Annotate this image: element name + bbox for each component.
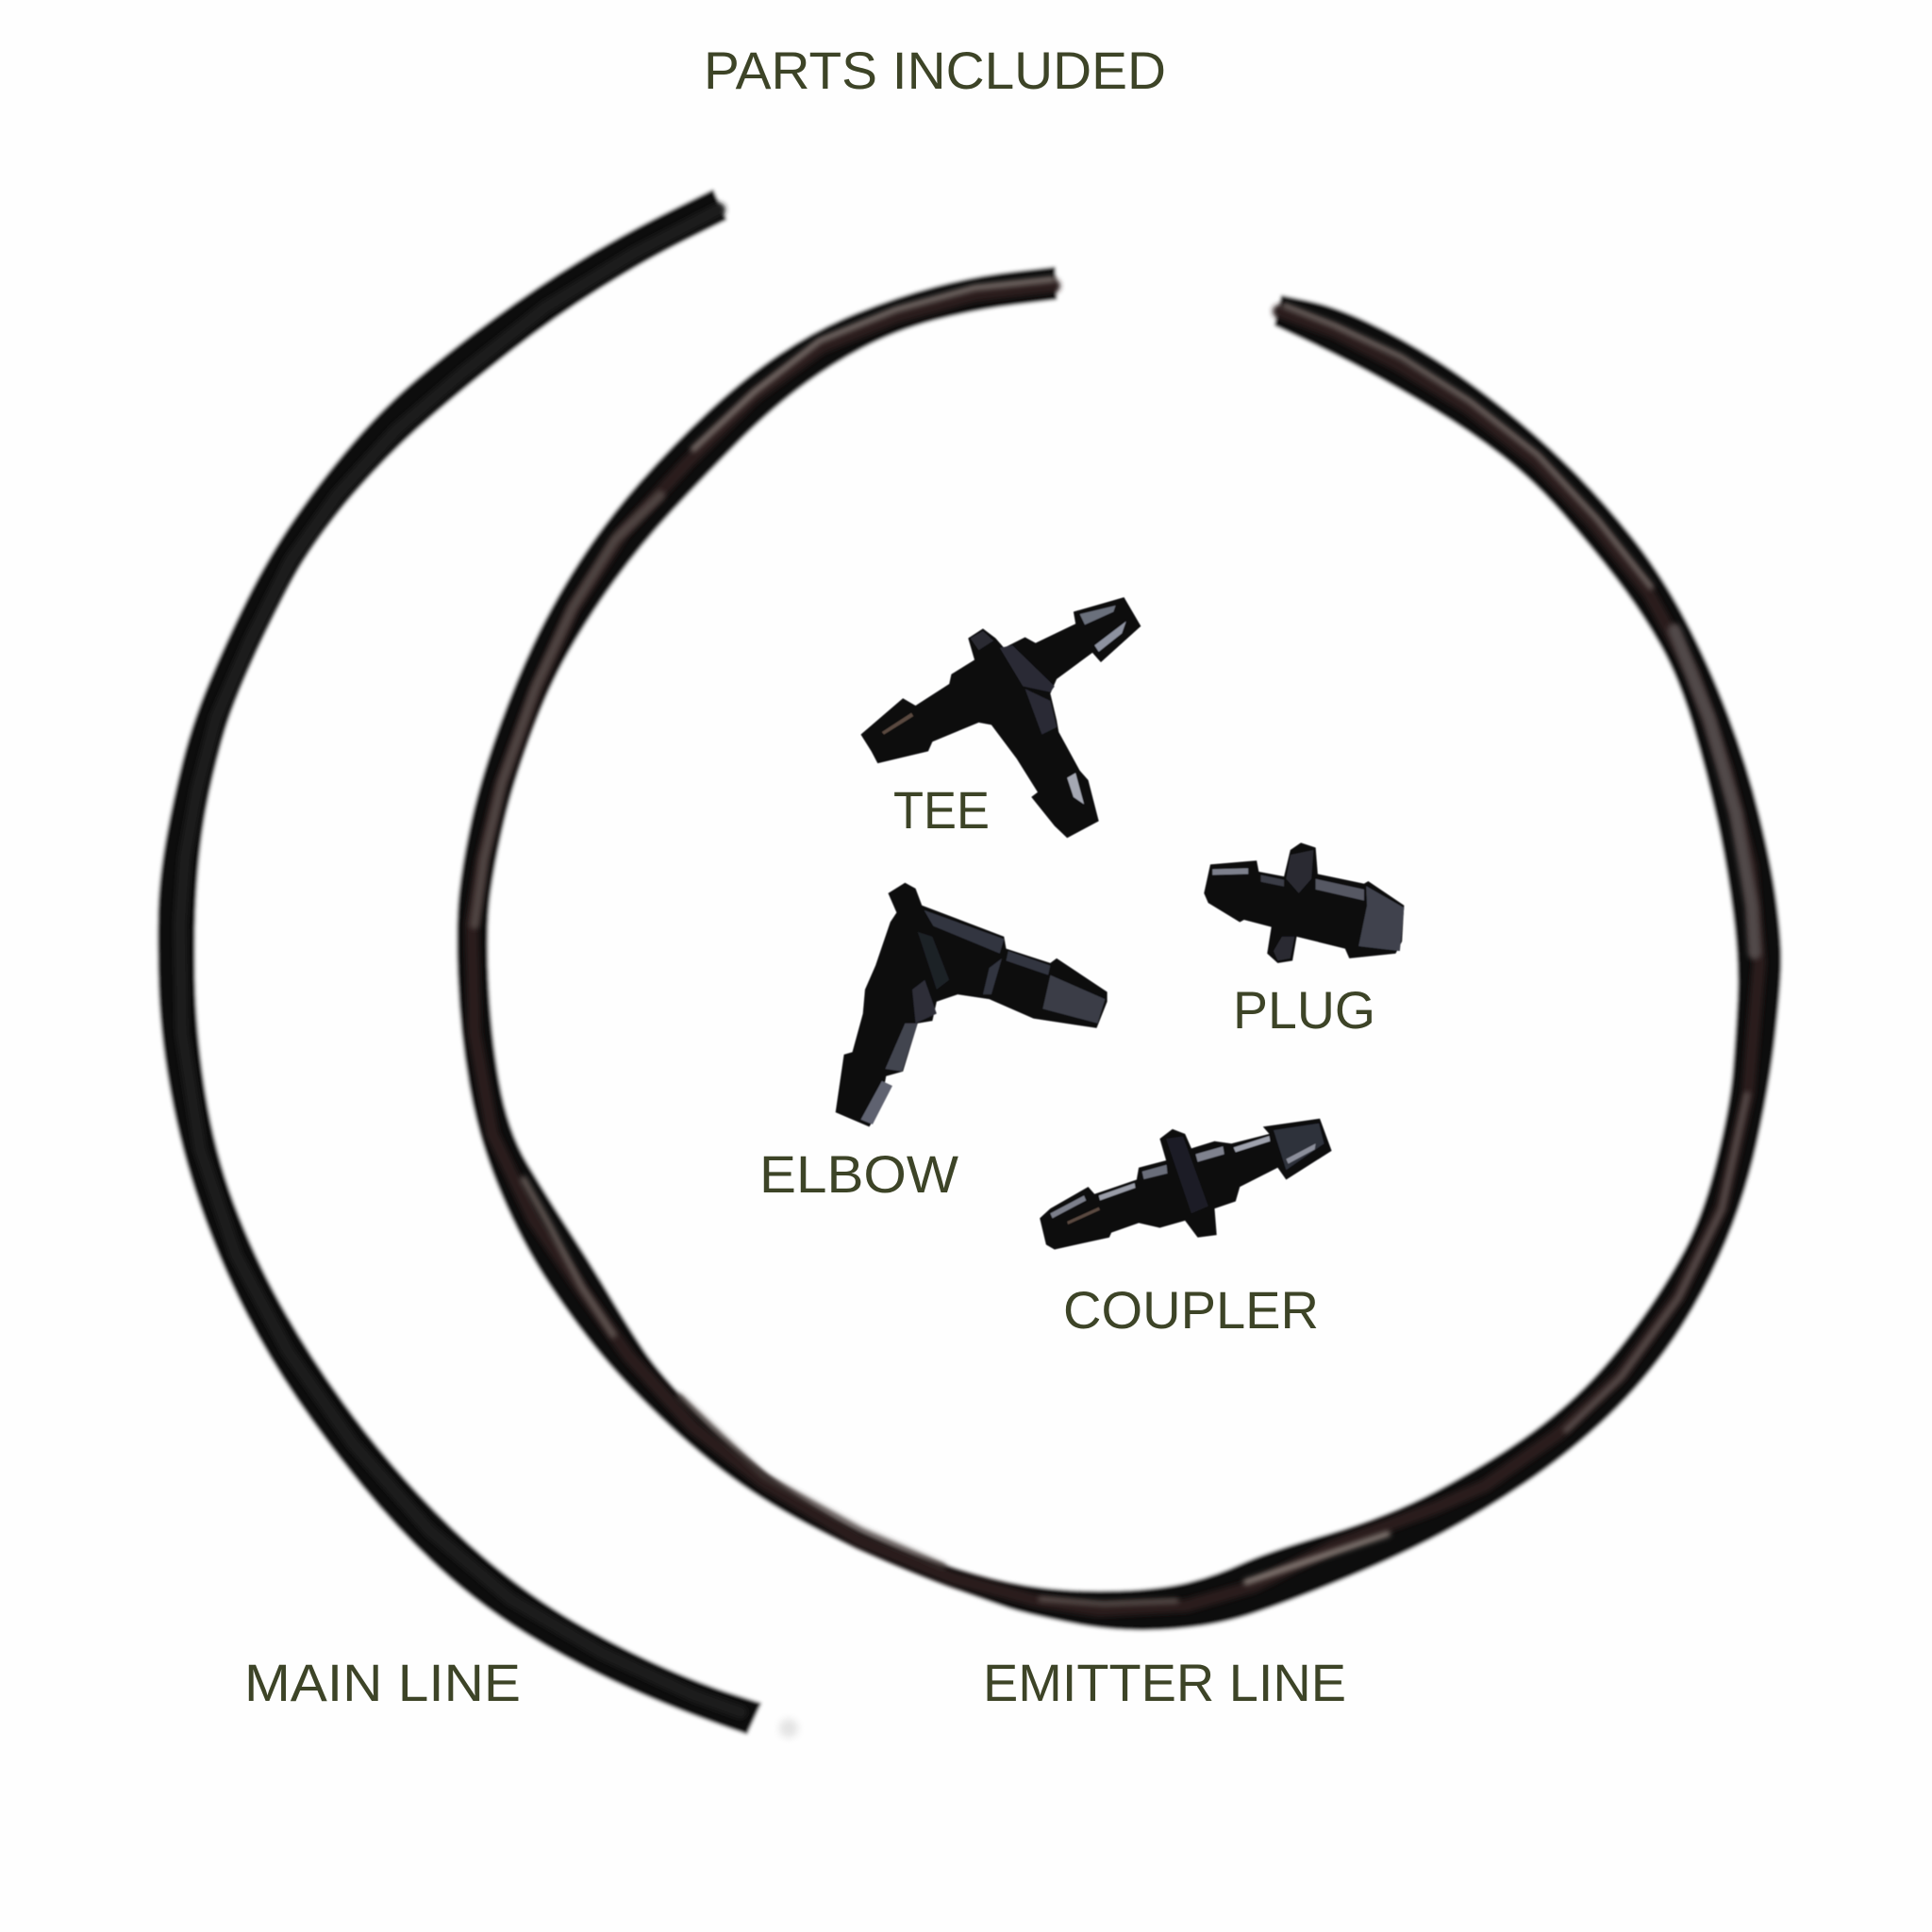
- tube: main line: [156, 187, 764, 1737]
- tube: emitter line: [456, 265, 1783, 1632]
- elbow highlights: [924, 910, 1004, 954]
- debris speck near main line end: [779, 1719, 798, 1738]
- main line silhouette: [156, 187, 764, 1737]
- emitter grey highlights: [475, 279, 1755, 1604]
- label: coupler: COUPLER: [1063, 1280, 1319, 1340]
- main line sheen: [180, 209, 741, 1712]
- fitting: elbow: [836, 883, 1108, 1126]
- plug highlights: [1358, 886, 1404, 951]
- tee highlights: [1080, 606, 1116, 625]
- tee body: [860, 597, 1141, 838]
- elbow body: [836, 883, 1108, 1126]
- fitting: tee: [860, 597, 1141, 838]
- plug body: [1204, 842, 1404, 963]
- label: main line: MAIN LINE: [244, 1653, 521, 1712]
- title: PARTS INCLUDED: [704, 41, 1166, 100]
- label: elbow: ELBOW: [759, 1144, 958, 1204]
- fitting: coupler: [1040, 1119, 1332, 1249]
- coupler body: [1040, 1119, 1332, 1249]
- emitter silhouette: [456, 265, 1783, 1632]
- label: emitter line: EMITTER LINE: [983, 1653, 1346, 1712]
- label: tee: TEE: [893, 780, 990, 840]
- fitting: plug: [1204, 842, 1404, 963]
- label: plug: PLUG: [1233, 980, 1375, 1040]
- emitter brown core: [472, 286, 1759, 1610]
- coupler highlights: [1099, 1183, 1136, 1200]
